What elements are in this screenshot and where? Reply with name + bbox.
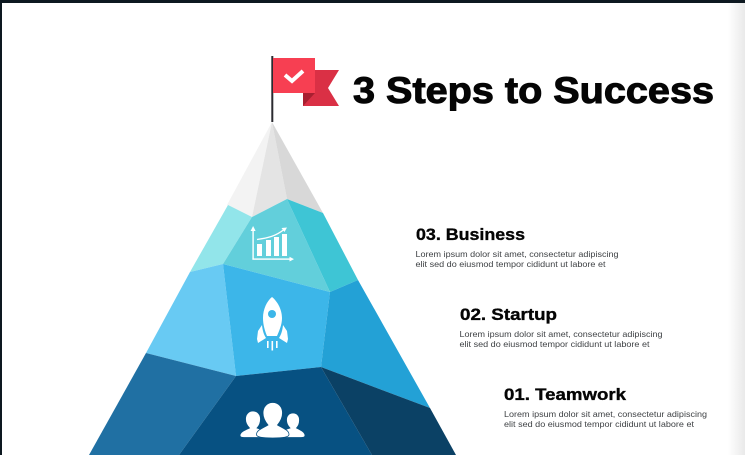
icon: bar chart	[251, 226, 294, 262]
step 03 text	[416, 225, 619, 269]
step 01 description: Lorem ipsum dolor sit amet, consectetur adipiscing	[504, 409, 707, 419]
step 01 heading: 01. Teamwork	[504, 385, 627, 404]
tier 02: blue	[146, 264, 430, 408]
title: 3 Steps to Success	[353, 70, 714, 111]
step 02 description: elit sed do eiusmod tempor cididunt ut labore et	[460, 339, 650, 349]
icon: rocket	[257, 297, 288, 350]
icon: team of three people	[240, 402, 305, 438]
step 01 description: elit sed do eiusmod tempor cididunt ut labore et	[504, 419, 695, 429]
step 03 description	[416, 249, 619, 269]
step 02 heading: 02. Startup	[460, 305, 557, 324]
tier 01: navy	[89, 353, 456, 455]
step 02 description: Lorem ipsum dolor sit amet, consectetur adipiscing	[460, 329, 663, 339]
peak: grey snow cap	[227, 122, 323, 217]
step 02 text	[460, 305, 663, 349]
icon: flag with check mark	[271, 56, 339, 122]
step 02 description	[460, 329, 663, 349]
step 03 heading: 03. Business	[416, 225, 525, 244]
step 03 description: Lorem ipsum dolor sit amet, consectetur adipiscing	[416, 249, 619, 259]
step 01 description	[504, 409, 707, 429]
step 03 description: elit sed do eiusmod tempor cididunt ut labore et	[416, 259, 606, 269]
tier 03: teal	[190, 199, 358, 292]
step 01 text	[504, 385, 707, 429]
mountain pyramid	[89, 122, 456, 455]
